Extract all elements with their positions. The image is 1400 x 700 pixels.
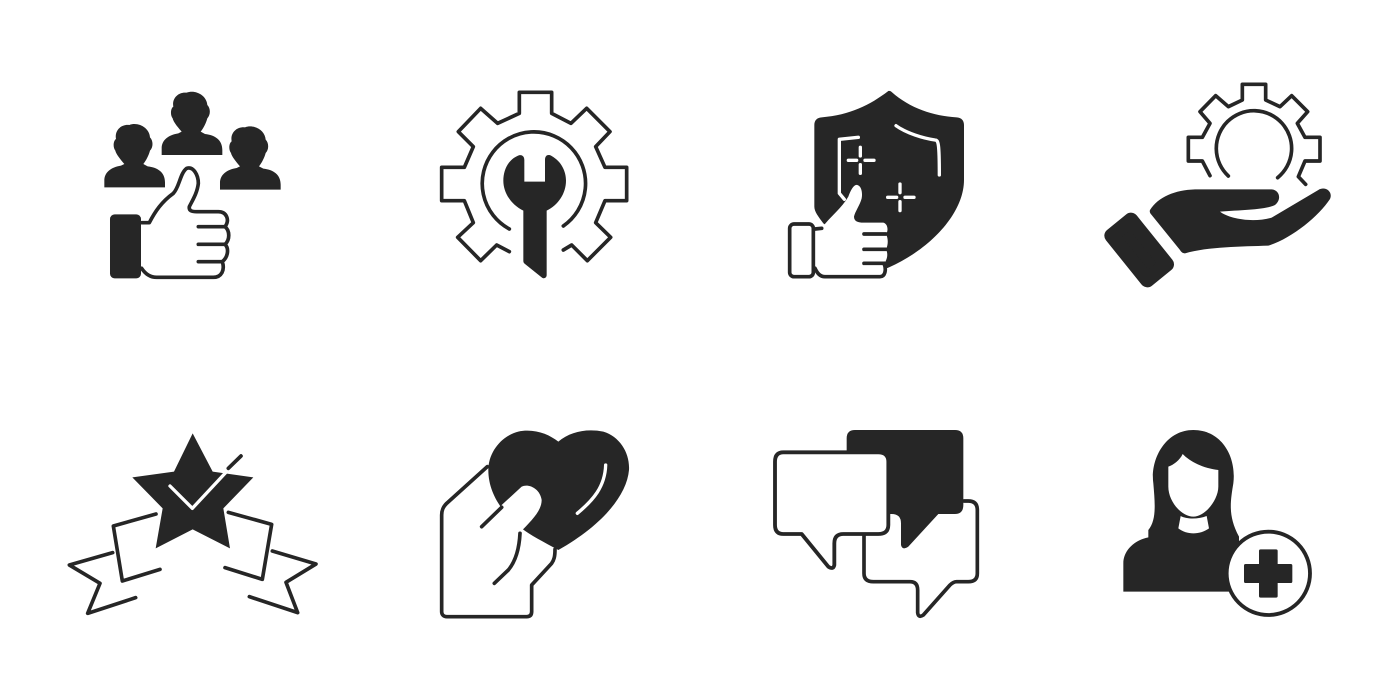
icon: speech bubbles <box>775 430 977 616</box>
icon: centre person <box>162 92 222 155</box>
icon: woman with plus <box>1123 430 1310 615</box>
icon: heart highlight <box>577 465 606 513</box>
icon: team with thumbs up <box>104 92 281 278</box>
icon: filled bubble <box>847 430 963 548</box>
icon: heart <box>488 430 629 550</box>
icon: star <box>132 433 253 548</box>
icon: open hand <box>1150 189 1331 253</box>
icon: right person <box>220 126 281 190</box>
icon: plus badge <box>1227 532 1310 615</box>
icon: cuff <box>1112 220 1167 280</box>
icon: thumbs up hand <box>110 168 229 278</box>
icon: gear with wrench <box>442 92 627 278</box>
icon: check mark <box>170 456 241 508</box>
icon: hand holding gear <box>1112 84 1331 280</box>
icon: right outline bubble <box>864 501 977 616</box>
icon: neck <box>1178 516 1209 533</box>
icon: left person <box>104 124 165 187</box>
icon: woman silhouette <box>1123 430 1239 592</box>
icon: shield <box>814 91 964 268</box>
icon: inner arc <box>482 132 586 229</box>
icon: hand holding heart <box>442 430 629 617</box>
icon: thumbs up hand <box>790 185 888 277</box>
icon: shield with thumbs up <box>790 91 964 277</box>
icon: shield highlights <box>839 126 939 199</box>
icon: gear inner arc <box>1216 111 1292 178</box>
icon: sparkles <box>848 147 914 211</box>
icon: gear outline <box>1188 84 1320 184</box>
icon: left outline bubble <box>775 452 888 568</box>
icon: gear outline <box>442 92 627 261</box>
icon: wrench <box>503 155 566 278</box>
icon: ribbon <box>69 512 316 613</box>
icon: face <box>1168 454 1218 517</box>
icon: hand <box>442 467 555 617</box>
icon: star with ribbon <box>69 433 316 613</box>
